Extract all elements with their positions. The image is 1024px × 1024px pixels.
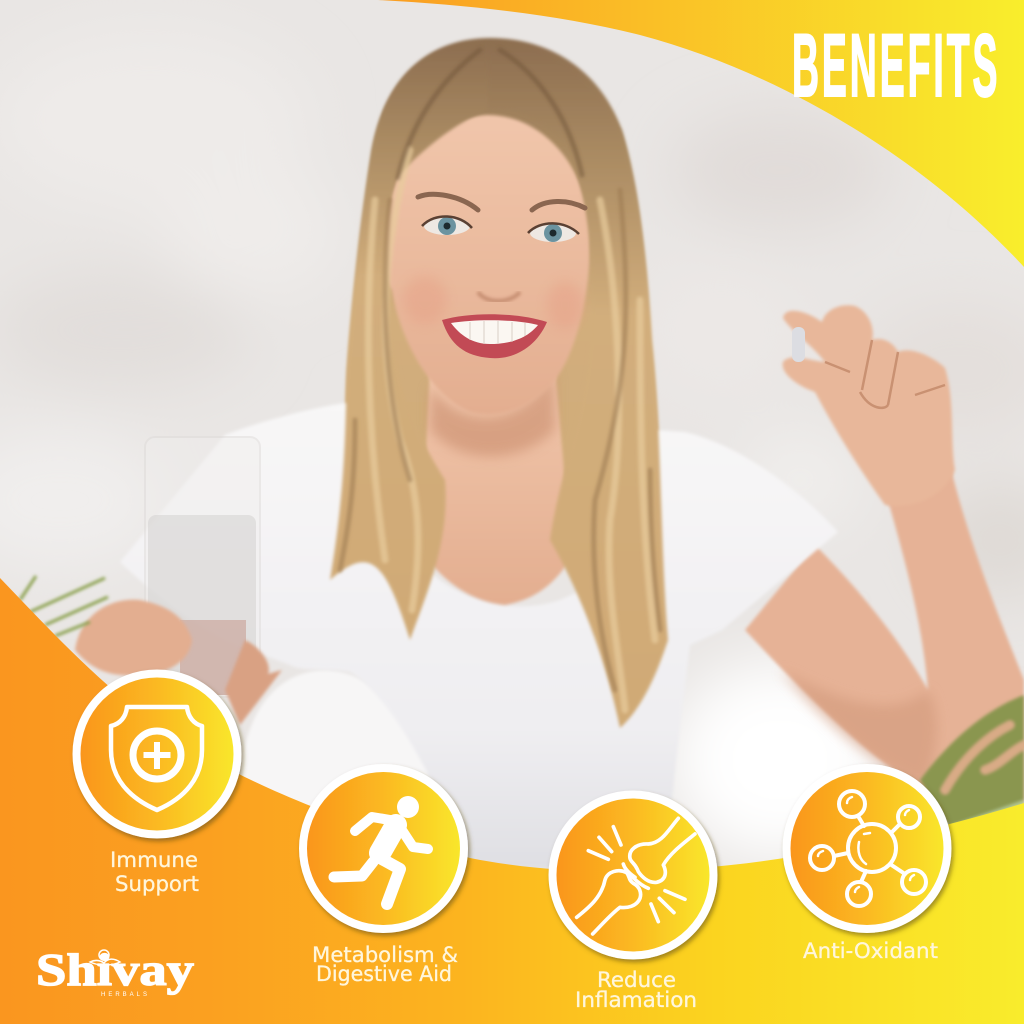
logo wordmark: Shivay (36, 944, 194, 995)
eyes (422, 216, 579, 242)
benefit: immune support (76, 674, 238, 896)
benefit: anti-oxidant (786, 768, 948, 963)
arm shading (780, 670, 937, 785)
hair strands front right (488, 42, 668, 728)
label: Metabolism and Digestive Aid: Metabolism & (312, 943, 458, 967)
benefit: reduce inflammation (552, 794, 714, 1012)
icon: molecule (786, 768, 948, 929)
finger lines (825, 340, 945, 408)
hair strands front left (330, 42, 488, 640)
arm: raised arm (745, 465, 1024, 820)
t-shirt (120, 403, 838, 868)
panel: orange-yellow bottom band (0, 578, 1024, 1024)
neck shadow (430, 370, 555, 456)
panel: yellow top-right corner (378, 0, 1024, 267)
hair back (322, 38, 668, 728)
label: Immune Support: Immune (110, 848, 198, 872)
neck and chest (400, 370, 570, 605)
cheek blush (403, 276, 583, 329)
icon: shield with plus (76, 674, 238, 834)
logo lotus mark (90, 950, 120, 965)
benefit: metabolism and digestive aid (303, 768, 464, 986)
label: Reduce Inflamation: Reduce (597, 968, 676, 992)
hand: holding capsule (783, 305, 955, 506)
heading: BENEFITS: BENEFITS (792, 16, 1000, 116)
label: Metabolism and Digestive Aid: Digestive Aid (316, 962, 452, 986)
knee (240, 670, 480, 860)
logo: Shivay Herbals (36, 944, 194, 998)
label: Immune Support: Support (115, 872, 199, 896)
label: Reduce Inflamation: Inflamation (575, 988, 697, 1012)
forearm and thumb (225, 640, 282, 725)
monstera leaf, bottom right (920, 695, 1024, 830)
logo tagline: HERBALS (101, 992, 150, 998)
photo: woman smiling (75, 38, 1024, 868)
eyebrows (418, 194, 585, 210)
icon: running figure (303, 768, 464, 929)
palm leaf, bottom left (20, 576, 108, 636)
capsule (792, 327, 805, 362)
label: Anti-Oxidant: Anti-Oxidant (803, 939, 938, 963)
glass of water (145, 437, 260, 697)
nose (478, 292, 520, 301)
hair streaks (340, 50, 660, 710)
face (377, 115, 590, 415)
smile (442, 314, 547, 358)
icon: knee joint (552, 794, 714, 956)
left arm and hand (75, 600, 192, 675)
